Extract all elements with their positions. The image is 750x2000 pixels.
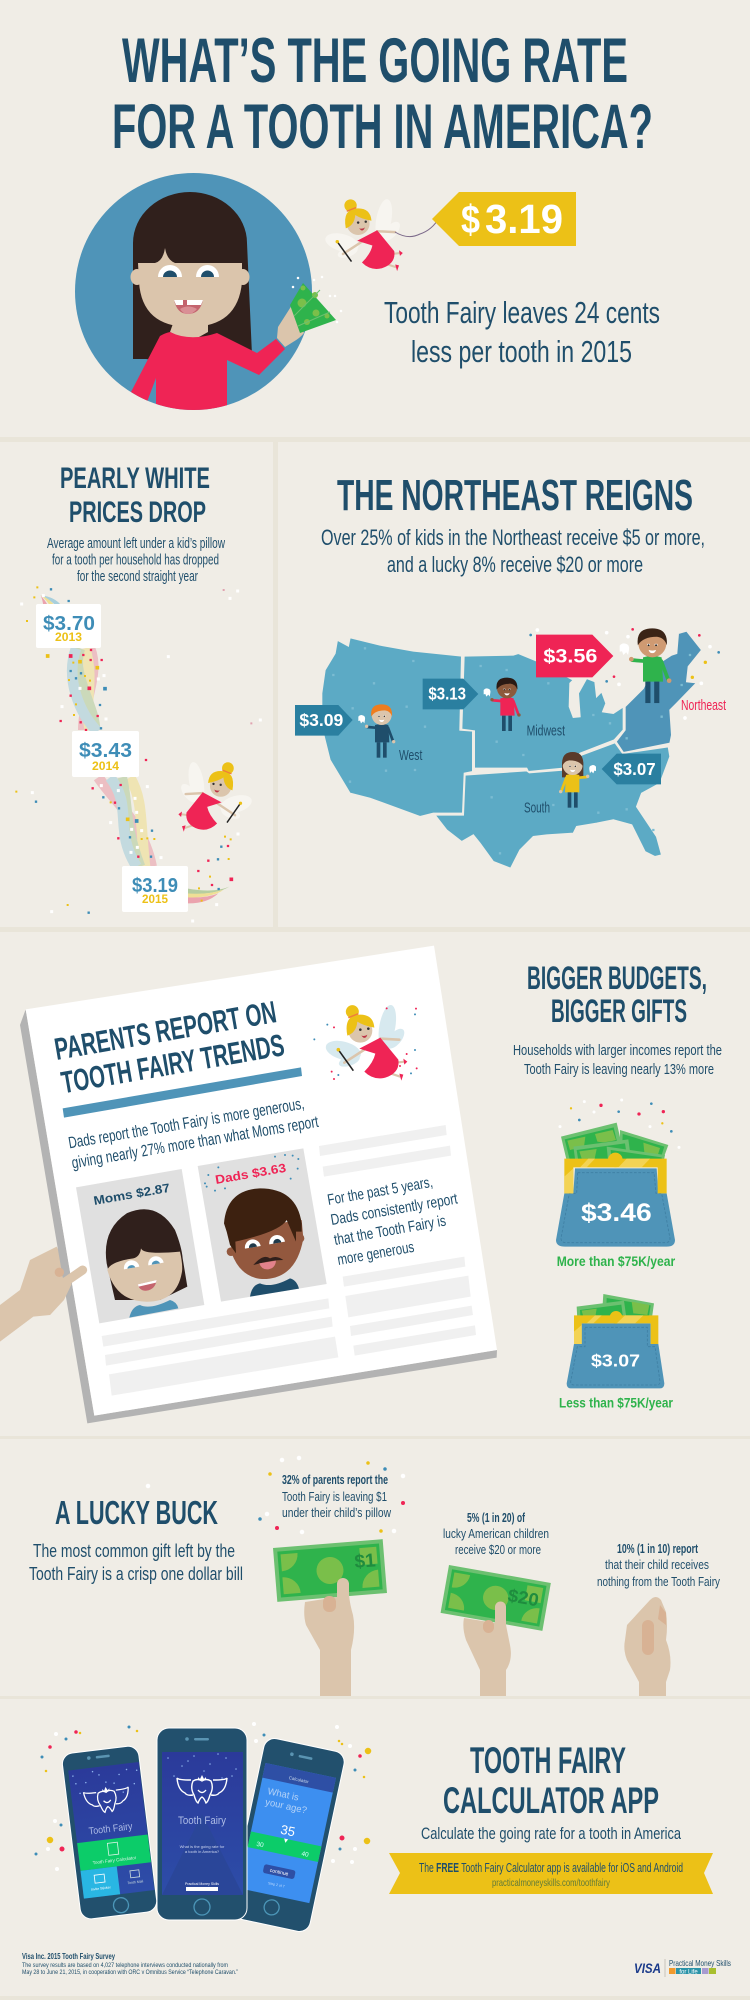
phone: right: your age?	[264, 1797, 308, 1816]
text: calculate: Calculate the going rate for a tooth in America	[421, 1825, 682, 1843]
heading: bigger budgets	[527, 960, 707, 1029]
confetti: phones	[36, 1724, 368, 1869]
newspaper side text: that the Tooth Fairy is	[333, 1212, 448, 1249]
photo: moms	[76, 1169, 204, 1323]
tag: south 3.07	[602, 754, 661, 784]
bill and hand: one dollar: $1	[354, 1550, 377, 1573]
phone: right	[228, 1736, 346, 1934]
newspaper intro text: giving nearly 27% more than what Moms report	[70, 1113, 320, 1172]
text: 5 percent: 5% (1 in 20) of	[467, 1510, 525, 1525]
newspaper headline	[52, 994, 287, 1100]
kid: northeast	[620, 628, 671, 703]
pillow: 2015 price	[122, 866, 188, 912]
region labels: Northeast	[681, 697, 727, 714]
empty hand	[624, 1597, 670, 1696]
hand holding newspaper	[0, 1247, 73, 1342]
thumb	[43, 1268, 83, 1315]
phone: left: Tooth Fairy Calculator	[92, 1855, 137, 1865]
newspaper side text: Dads consistently report	[329, 1190, 459, 1229]
text: northeast description	[321, 525, 705, 577]
region: midwest	[462, 653, 623, 772]
panel: newspaper	[0, 946, 497, 1423]
newspaper side text	[326, 1174, 459, 1269]
chart: us regional map	[322, 631, 702, 868]
fairy with price tag string	[323, 198, 439, 271]
map confetti	[531, 629, 719, 718]
text: 10 percent: that their child receives	[605, 1557, 709, 1572]
section bands	[0, 437, 750, 2000]
icon: fairy flying	[178, 761, 254, 832]
phone: right: 30	[256, 1841, 265, 1849]
title	[112, 26, 653, 162]
phone: center: Tooth Fairy	[178, 1815, 226, 1827]
text: 10 percent	[597, 1541, 720, 1589]
text: most common gift: Tooth Fairy is a crisp one dollar bill	[29, 1563, 243, 1584]
region: west	[322, 638, 473, 817]
tag: west 3.09	[295, 705, 353, 736]
phone: left: Tooth Fairy	[88, 1821, 133, 1838]
pillow: 2013 price: 2013	[55, 632, 82, 644]
chart: falling price ribbon trail	[16, 587, 260, 921]
bill and hand: twenty dollars	[441, 1565, 551, 1696]
placeholder lines	[102, 1125, 476, 1396]
label: less than 75k: Less than $75K/year	[559, 1396, 674, 1411]
text: 32 percent: under their child’s pillow	[282, 1505, 391, 1520]
tag: northeast 3.56	[536, 635, 613, 677]
heading: pearly white prices drop	[60, 462, 210, 529]
pillow: 2013 price: $3.70	[43, 612, 95, 635]
phone: left	[61, 1745, 158, 1920]
tag: northeast 3.56: $3.56	[543, 647, 598, 668]
logo: visa practical money skills: Practical Money Skills	[669, 1958, 731, 1968]
banner: free app: practicalmoneyskills.com/toothfairy	[492, 1877, 611, 1889]
pillow: 2014 price: 2014	[92, 761, 120, 773]
phone: left: Tooth Mail	[127, 1879, 144, 1885]
logo: visa practical money skills: VISA	[634, 1960, 661, 1976]
logo: visa practical money skills: for Life	[679, 1970, 698, 1976]
pillow: 2015 price: $3.19	[132, 874, 178, 897]
text: most common gift: The most common gift left by the	[33, 1540, 235, 1561]
banner: free app	[389, 1853, 713, 1894]
text: 32 percent: 32% of parents report the	[282, 1472, 388, 1487]
text: average amount: Average amount left under a kid’s pillow	[47, 536, 225, 552]
text: 32 percent: Tooth Fairy is leaving $1	[282, 1489, 387, 1504]
footnote: Visa Inc. 2015 Tooth Fairy Survey	[22, 1952, 115, 1961]
phone: right: 40	[301, 1850, 310, 1859]
newspaper intro text: Dads report the Tooth Fairy is more generous,	[67, 1095, 306, 1152]
photo: dads	[198, 1148, 327, 1302]
photo: dads: Dads $3.63	[214, 1161, 287, 1187]
price tag: $	[461, 198, 480, 242]
bill and hand: twenty dollars: $20	[506, 1585, 540, 1610]
tag: midwest 3.13: $3.13	[428, 683, 466, 703]
paper front	[26, 946, 497, 1416]
text: 5 percent	[443, 1510, 549, 1557]
pillow: 2014 price: $3.43	[79, 739, 132, 762]
tag: south 3.07: $3.07	[613, 759, 656, 779]
newspaper side text: more generous	[336, 1239, 416, 1269]
kid: midwest	[484, 678, 521, 731]
text: northeast description: and a lucky 8% receive $20 or more	[387, 552, 643, 577]
text: 5 percent: lucky American children	[443, 1526, 549, 1541]
region: south	[435, 743, 670, 868]
phone: right: 35	[279, 1822, 297, 1839]
region labels: West	[399, 747, 423, 764]
pillow: 2014 price	[72, 731, 139, 777]
heading: tooth fairy calculator app: TOOTH FAIRY	[470, 1740, 626, 1781]
price tag: 3.19	[485, 196, 563, 242]
region labels	[399, 697, 727, 817]
bill and hand: one dollar	[273, 1539, 387, 1696]
heading: a lucky buck: A LUCKY BUCK	[55, 1494, 218, 1531]
region: northeast	[616, 631, 702, 753]
confetti: lucky buck	[148, 1458, 403, 1532]
tag: midwest 3.13	[423, 679, 478, 709]
text: most common gift	[29, 1540, 243, 1584]
pillow: 2013 price	[36, 604, 101, 648]
text: 10 percent: 10% (1 in 10) report	[617, 1541, 698, 1556]
photo: moms: Moms $2.87	[92, 1181, 171, 1208]
kid: south	[559, 752, 596, 808]
icon: large purse: $3.46	[581, 1200, 652, 1227]
phone: center: What is the going rate for	[180, 1844, 225, 1849]
kid: west	[358, 704, 395, 758]
text: tooth fairy leaves less	[384, 295, 660, 369]
tag: west 3.09: $3.09	[299, 710, 343, 730]
text: tooth fairy leaves less: less per tooth in 2015	[411, 334, 632, 369]
phone: center: a tooth in America?	[185, 1849, 220, 1854]
phone: center: Practical Money Skills	[185, 1882, 219, 1886]
text: 5 percent: receive $20 or more	[455, 1542, 541, 1557]
region labels: Midwest	[527, 723, 566, 740]
text: average amount: for a tooth per household has dropped	[52, 552, 219, 568]
text: 32 percent	[282, 1472, 391, 1520]
heading: pearly white prices drop: PRICES DROP	[69, 496, 206, 529]
heading: pearly white prices drop: PEARLY WHITE	[60, 462, 210, 495]
phone: right: Calculator	[288, 1775, 310, 1784]
phone: right: Step 2 of 7	[268, 1881, 285, 1889]
pillow: 2015 price: 2015	[142, 894, 169, 906]
phone: center	[157, 1728, 247, 1920]
paper sheet	[20, 1009, 497, 1423]
phone: right: continue	[269, 1868, 289, 1878]
heading: tooth fairy calculator app	[443, 1740, 659, 1821]
newspaper side text: For the past 5 years,	[326, 1174, 434, 1209]
text: households	[513, 1043, 722, 1078]
region labels: South	[524, 800, 550, 817]
newspaper headline: PARENTS REPORT ON	[52, 994, 279, 1067]
phone: right: What is	[266, 1786, 300, 1804]
footnote: May 28 to June 21, 2015, in cooperation with ORC v Omnibus Service “Telephone Caravan.”	[22, 1969, 238, 1976]
logo: visa practical money skills	[634, 1958, 731, 1977]
newspaper fairy	[314, 1004, 417, 1081]
phone: left: Invite Sticker	[91, 1885, 112, 1892]
newspaper headline: TOOTH FAIRY TRENDS	[59, 1027, 287, 1100]
icon: small purse	[567, 1294, 664, 1388]
footnote	[22, 1952, 238, 1976]
text: average amount	[47, 536, 225, 585]
footnote: The survey results are based on 4,027 telephone interviews conducted nationally from	[22, 1962, 228, 1969]
price tag	[432, 192, 576, 246]
headline rule	[63, 1067, 302, 1118]
icon: small purse: $3.07	[591, 1351, 640, 1371]
text: average amount: for the second straight year	[77, 569, 198, 585]
illustration: girl in blue circle with money	[75, 173, 341, 415]
icon: large purse	[556, 1100, 679, 1247]
label: more than 75k: More than $75K/year	[557, 1254, 676, 1269]
